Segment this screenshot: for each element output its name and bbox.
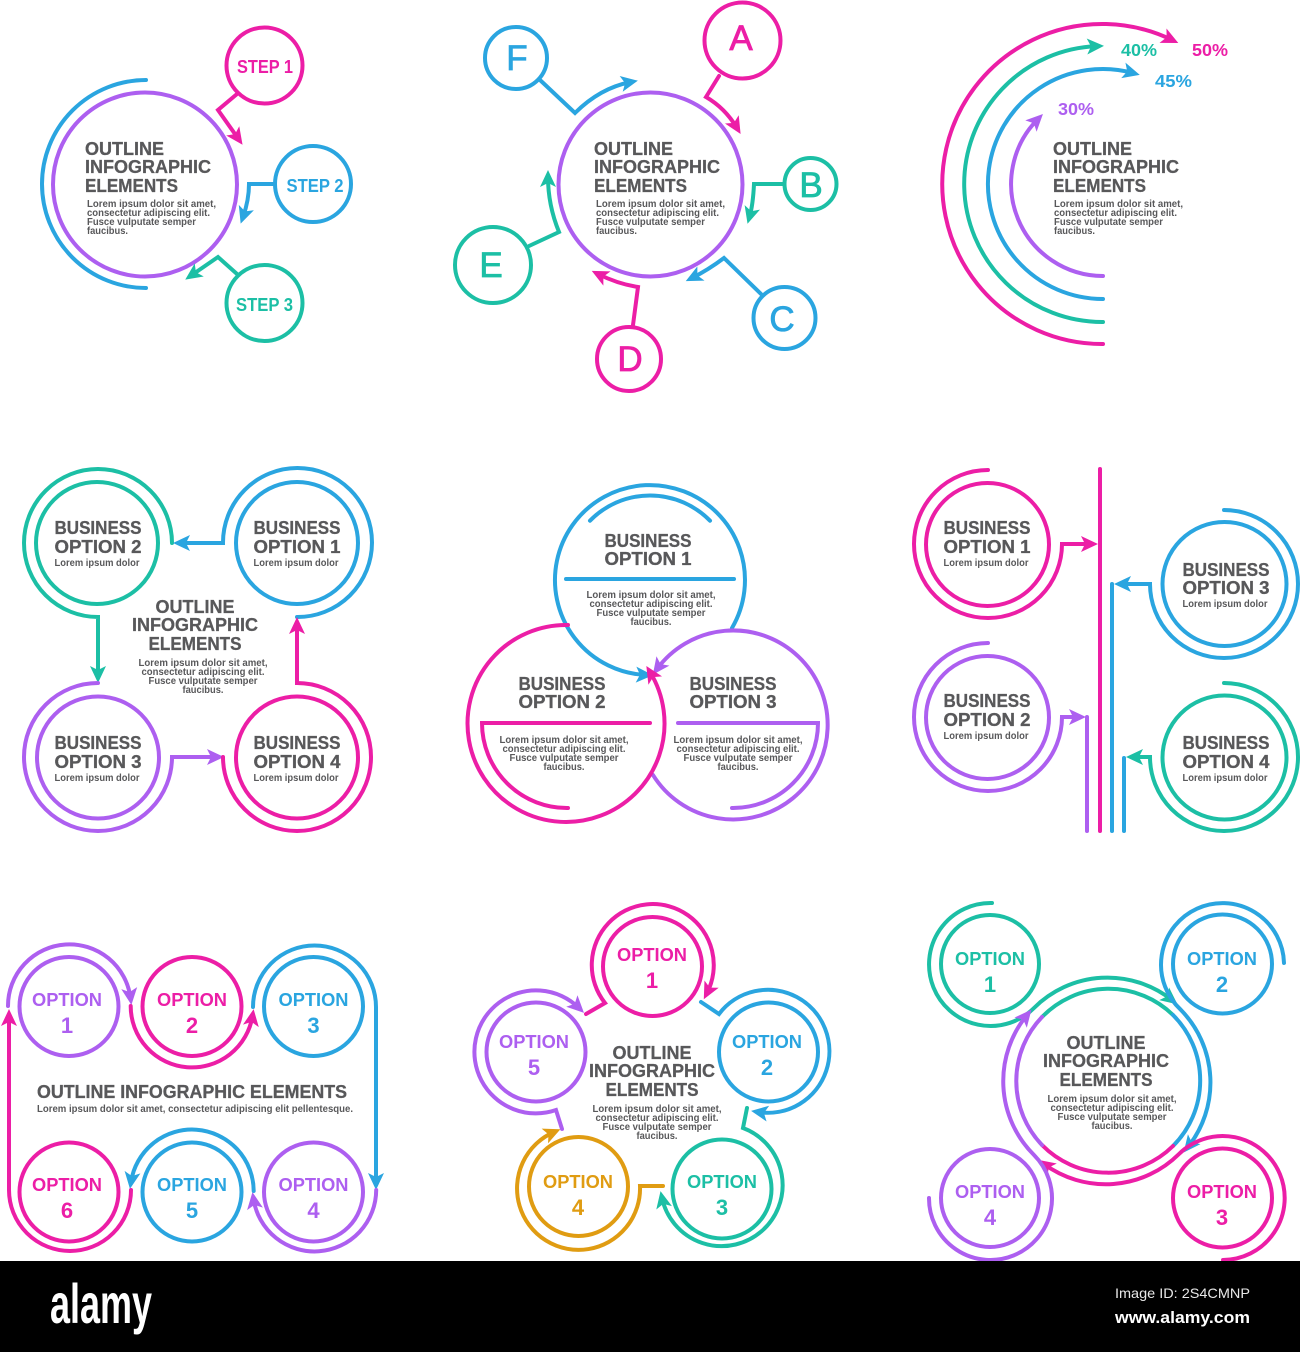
option 1: OPTION: [617, 945, 687, 965]
option 2: BUSINESS: [944, 691, 1030, 711]
arc 30%: 30%: [1058, 99, 1094, 119]
text block: OUTLINE: [1066, 1033, 1146, 1053]
option 4: [223, 624, 371, 831]
step 3: [191, 257, 302, 341]
footer bar: [0, 1261, 1300, 1352]
text block: consectetur adipiscing elit.: [142, 666, 265, 678]
option 1: OPTION 1: [944, 537, 1030, 557]
option 4: OPTION 4: [254, 752, 340, 772]
text block: INFOGRAPHIC: [85, 157, 211, 177]
node E: E: [479, 246, 503, 285]
option 4: 4: [307, 1198, 320, 1223]
option 2: Lorem ipsum dolor: [54, 557, 140, 569]
option 3 with spiral arrow: 3: [1216, 1205, 1228, 1230]
text block: OUTLINE: [85, 139, 164, 159]
option 1: 1: [61, 1013, 73, 1038]
text block: Lorem ipsum dolor sit amet,: [592, 1103, 722, 1115]
panel: business options with vertical lines: [914, 469, 1298, 831]
arc 40%: [964, 40, 1157, 322]
option 1: [914, 470, 1091, 618]
option 5: OPTION: [157, 1175, 227, 1195]
arc 50%: 50%: [1192, 40, 1228, 60]
step 3: STEP 3: [236, 295, 293, 315]
option 2: 2: [186, 1013, 198, 1038]
option 3: [662, 1108, 783, 1246]
option 1: [586, 904, 714, 1016]
text block: [85, 139, 216, 237]
text block: Lorem ipsum dolor sit amet,: [596, 198, 725, 210]
step 2: [243, 146, 351, 222]
option 3: BUSINESS: [1182, 560, 1270, 580]
option 1: consectetur adipiscing elit.: [590, 598, 713, 610]
text block: OUTLINE: [156, 597, 234, 617]
option 2: [468, 625, 665, 822]
option 5: [474, 990, 586, 1129]
node A: A: [729, 19, 753, 58]
option 3: 3: [716, 1195, 728, 1220]
option 2 with spiral arrow: 2: [1216, 972, 1228, 997]
option 4 with spiral arrow: 4: [984, 1205, 997, 1230]
text block: [1053, 139, 1183, 237]
panel: six options serpentine: [8, 944, 376, 1251]
node F: [485, 27, 631, 113]
option 2: [701, 990, 829, 1113]
option 3: 3: [307, 1013, 320, 1038]
text block: [37, 1082, 353, 1115]
node C: [692, 258, 816, 349]
text block: Fusce vulputate semper: [87, 216, 196, 228]
text block: ELEMENTS: [85, 176, 178, 196]
option 4: OPTION 4: [1182, 752, 1270, 772]
arc 40%: 40%: [1121, 40, 1157, 60]
text block: INFOGRAPHIC: [589, 1061, 715, 1081]
text block: consectetur adipiscing elit.: [87, 207, 210, 219]
arc 50%: [942, 24, 1228, 344]
option 1: Lorem ipsum dolor sit amet,: [586, 589, 716, 601]
text block: [594, 139, 725, 237]
option 3: OPTION 3: [690, 692, 776, 712]
text block: OUTLINE: [612, 1043, 692, 1063]
step 2: STEP 2: [286, 176, 344, 196]
option 3: Fusce vulputate semper: [684, 752, 792, 764]
option 2: OPTION 2: [944, 710, 1030, 730]
text block: ELEMENTS: [1053, 176, 1146, 196]
option 3: OPTION 3: [1182, 578, 1270, 598]
option 2 with spiral arrow: OPTION: [1187, 949, 1257, 969]
option 1: BUSINESS: [254, 518, 340, 538]
option 2: OPTION 2: [518, 692, 606, 712]
option 4: OPTION: [543, 1172, 613, 1192]
text block: ELEMENTS: [606, 1080, 698, 1100]
option 2: Lorem ipsum dolor: [944, 730, 1028, 742]
option 3 with spiral arrow: OPTION: [1187, 1182, 1257, 1202]
option 2: 2: [761, 1055, 773, 1080]
option 6: OPTION: [32, 1175, 102, 1195]
option 2: [131, 957, 252, 1067]
option 3: [253, 946, 376, 1183]
panel: five options cycle: [474, 904, 829, 1250]
option 3: [1121, 510, 1298, 658]
option 4: [1133, 683, 1298, 831]
option 3: BUSINESS: [54, 733, 142, 753]
option 4: [517, 1132, 663, 1250]
step 1: STEP 1: [237, 57, 293, 77]
option 1: Lorem ipsum dolor: [944, 557, 1028, 569]
option 1: OPTION 1: [604, 549, 692, 569]
text block: Fusce vulputate semper: [602, 1121, 712, 1133]
option 2: Fusce vulputate semper: [510, 752, 618, 764]
text block: consectetur adipiscing elit.: [596, 1112, 719, 1124]
text block: INFOGRAPHIC: [594, 157, 720, 177]
option 3 with spiral arrow: [1042, 1136, 1285, 1260]
option 6: [9, 1016, 131, 1251]
option 2: OPTION: [732, 1032, 802, 1052]
option 3: [24, 683, 217, 831]
option 4: 4: [572, 1195, 585, 1220]
node D: [597, 274, 661, 391]
option 4: Lorem ipsum dolor: [1182, 772, 1268, 784]
text block: consectetur adipiscing elit.: [1050, 1102, 1174, 1114]
option 2: faucibus.: [544, 761, 585, 773]
node B: [750, 158, 836, 217]
option 1 with spiral arrow: 1: [984, 972, 996, 997]
node A: [704, 2, 780, 128]
arc 45%: 45%: [1155, 71, 1192, 91]
text block: Fusce vulputate semper: [596, 216, 705, 228]
node C: C: [769, 300, 795, 339]
option 2: consectetur adipiscing elit.: [502, 743, 626, 755]
option 1: [180, 468, 372, 617]
text block: ELEMENTS: [148, 634, 242, 654]
option 3: OPTION 3: [54, 752, 142, 772]
panel: three steps: [42, 28, 351, 341]
text block: [132, 597, 268, 696]
text block: faucibus.: [182, 684, 224, 696]
arc 30%: [1011, 99, 1103, 276]
option 1: BUSINESS: [604, 531, 692, 551]
text block: ELEMENTS: [1060, 1070, 1152, 1090]
option 3: faucibus.: [718, 761, 759, 773]
text block: ELEMENTS: [594, 176, 687, 196]
option 3: OPTION: [687, 1172, 757, 1192]
text block: INFOGRAPHIC: [132, 615, 258, 635]
option 4 with spiral arrow: OPTION: [955, 1182, 1025, 1202]
text block: INFOGRAPHIC: [1053, 157, 1179, 177]
option 5: 5: [528, 1055, 540, 1080]
panel: four options around central circle: [929, 903, 1285, 1260]
option 2: BUSINESS: [518, 674, 606, 694]
option 3: Lorem ipsum dolor: [1182, 598, 1268, 610]
option 1: OPTION: [32, 990, 102, 1010]
text block: faucibus.: [1092, 1120, 1133, 1132]
option 4: Lorem ipsum dolor: [254, 772, 338, 784]
text block: consectetur adipiscing elit.: [1054, 207, 1177, 219]
text block: consectetur adipiscing elit.: [596, 207, 719, 219]
text block: OUTLINE: [594, 139, 673, 159]
text block: faucibus.: [636, 1130, 678, 1142]
option 1 with spiral arrow: [929, 903, 1173, 1026]
text block: OUTLINE: [1053, 139, 1132, 159]
option 2: [24, 469, 172, 676]
option 4 with spiral arrow: [929, 1015, 1052, 1260]
text block: faucibus.: [87, 225, 128, 237]
option 1: [8, 944, 131, 1056]
node B: B: [799, 166, 823, 205]
option 5: 5: [186, 1198, 198, 1223]
text block: Lorem ipsum dolor sit amet,: [1054, 198, 1183, 210]
text block: Lorem ipsum dolor sit amet,: [1048, 1093, 1177, 1105]
option 4: BUSINESS: [254, 733, 340, 753]
option 6: 6: [61, 1198, 73, 1223]
option 3: Lorem ipsum dolor: [54, 772, 140, 784]
text block: Fusce vulputate semper: [1058, 1111, 1166, 1123]
panel: concentric percentage arcs: [942, 24, 1228, 344]
option 5: [131, 1130, 254, 1242]
option 1: faucibus.: [630, 616, 672, 628]
text block: Lorem ipsum dolor sit amet, consectetur adipiscing elit pellentesque.: [37, 1103, 353, 1115]
node D: D: [617, 340, 643, 379]
option 3: consectetur adipiscing elit.: [676, 743, 800, 755]
arc 45%: [988, 69, 1192, 299]
text block: [589, 1043, 722, 1142]
option 3: Lorem ipsum dolor sit amet,: [674, 734, 803, 746]
text block: Fusce vulputate semper: [1054, 216, 1163, 228]
text block: Lorem ipsum dolor sit amet,: [87, 198, 216, 210]
text block: OUTLINE INFOGRAPHIC ELEMENTS: [37, 1082, 347, 1102]
option 3: OPTION: [278, 990, 348, 1010]
vertical timeline lines: [1087, 469, 1124, 831]
option 1: [555, 485, 745, 675]
text block: [1043, 1033, 1177, 1132]
panel: four business options loop: [24, 468, 372, 831]
option 2: OPTION: [157, 990, 227, 1010]
text block: Lorem ipsum dolor sit amet,: [138, 657, 268, 669]
option 3: BUSINESS: [690, 674, 776, 694]
text block: faucibus.: [596, 225, 637, 237]
option 2: Lorem ipsum dolor sit amet,: [500, 734, 629, 746]
step 1: [218, 28, 302, 139]
option 3: [653, 630, 828, 819]
option 1 with spiral arrow: OPTION: [955, 949, 1025, 969]
option 2: [914, 643, 1079, 791]
text block: faucibus.: [1054, 225, 1095, 237]
option 1: Fusce vulputate semper: [596, 607, 706, 619]
option 1: 1: [646, 968, 658, 993]
panel: six letters: [455, 2, 836, 391]
option 4: BUSINESS: [1182, 733, 1270, 753]
node E: [455, 177, 559, 303]
footer image id: Image ID: 2S4CMNP: [1115, 1285, 1250, 1301]
option 4: OPTION: [278, 1175, 348, 1195]
node F: F: [506, 39, 528, 78]
text block: Fusce vulputate semper: [148, 675, 258, 687]
option 2 with spiral arrow: [1161, 903, 1284, 1147]
main circle with outer arc: [42, 80, 237, 288]
option 1: BUSINESS: [944, 518, 1030, 538]
text block: INFOGRAPHIC: [1043, 1051, 1169, 1071]
option 2: OPTION 2: [54, 537, 142, 557]
option 5: OPTION: [499, 1032, 569, 1052]
option 4: [254, 1142, 376, 1251]
option 2: BUSINESS: [54, 518, 142, 538]
option 1: OPTION 1: [254, 537, 340, 557]
main circle: [558, 92, 742, 276]
option 1: Lorem ipsum dolor: [254, 557, 338, 569]
footer logo: alamy: [50, 1272, 152, 1335]
panel: three overlapping circles: [468, 485, 828, 822]
footer url: www.alamy.com: [1114, 1308, 1250, 1327]
